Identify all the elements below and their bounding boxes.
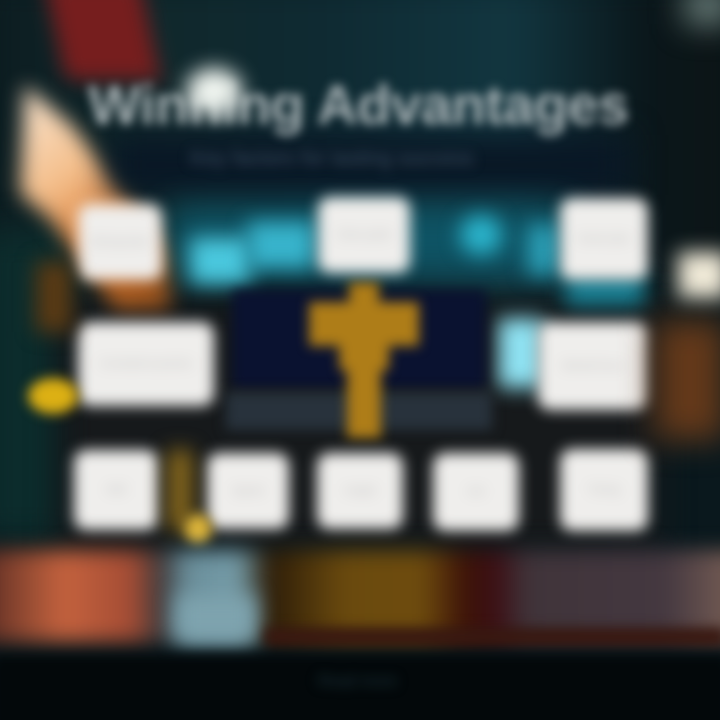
decoration: brown left figure (36, 262, 72, 332)
card: bottom 5 (560, 449, 648, 531)
card: bottom 3: Insight (344, 485, 376, 497)
decoration: flame (4, 76, 184, 322)
icon: gold trophy (300, 274, 428, 446)
card: top right: Smart plan (577, 233, 631, 245)
background: centre lower dark wall (60, 300, 660, 550)
card: bottom 4: Grit (467, 486, 485, 498)
panel: central caption strip (226, 392, 492, 430)
decoration: right brown figure (655, 320, 720, 440)
card: bottom 3 (317, 453, 403, 529)
decoration: yellow blob (28, 378, 78, 414)
background: upper dark wall (0, 0, 720, 300)
card: bottom 1: Skill (106, 484, 126, 496)
card: bottom 5: Timing (588, 484, 620, 496)
card: bottom 4 (433, 453, 519, 531)
card: top right (560, 198, 648, 280)
decoration: cyan glow middle (248, 222, 314, 268)
card: top left (78, 204, 162, 280)
band: light blue block extension (176, 595, 256, 643)
band: black footer (0, 655, 720, 720)
background: left dark green column (0, 230, 65, 540)
decoration: right white glow (678, 252, 720, 298)
decoration: top right glow (685, 0, 720, 24)
decoration: gold column (168, 450, 192, 530)
card: top centre (318, 197, 410, 273)
decoration: right cyan edge (528, 225, 558, 275)
decoration: cyan strip under right card (565, 272, 645, 306)
card: middle right: Mental focus (562, 360, 624, 372)
band: dark red table edge (265, 628, 720, 646)
decoration: cyan glow left (190, 238, 250, 284)
decoration: white orb (186, 68, 242, 114)
card: top centre: Clear goals (336, 229, 392, 241)
card: top left: Strong team (90, 236, 150, 248)
card: bottom 1 (74, 450, 158, 530)
decoration: red curtain (44, 0, 161, 80)
panel: central dark board (232, 290, 486, 388)
card: middle right (538, 322, 648, 410)
decoration: teal spot (460, 215, 502, 255)
band: bottom table (0, 550, 720, 642)
card: bottom 2 (207, 453, 289, 529)
card: middle left: Consistent practice (99, 358, 193, 370)
decoration: cyan band base (170, 205, 570, 275)
card: middle left (78, 322, 214, 406)
footer text: Read more (318, 673, 397, 690)
decoration: gold spark (184, 514, 212, 544)
title: Winning Advantages (88, 73, 628, 136)
card: bottom 2: Speed (232, 485, 264, 497)
decoration: right cyan glow (498, 318, 544, 388)
decoration: dark title band (110, 135, 630, 195)
subtitle: Key factors for lasting success (190, 147, 474, 170)
